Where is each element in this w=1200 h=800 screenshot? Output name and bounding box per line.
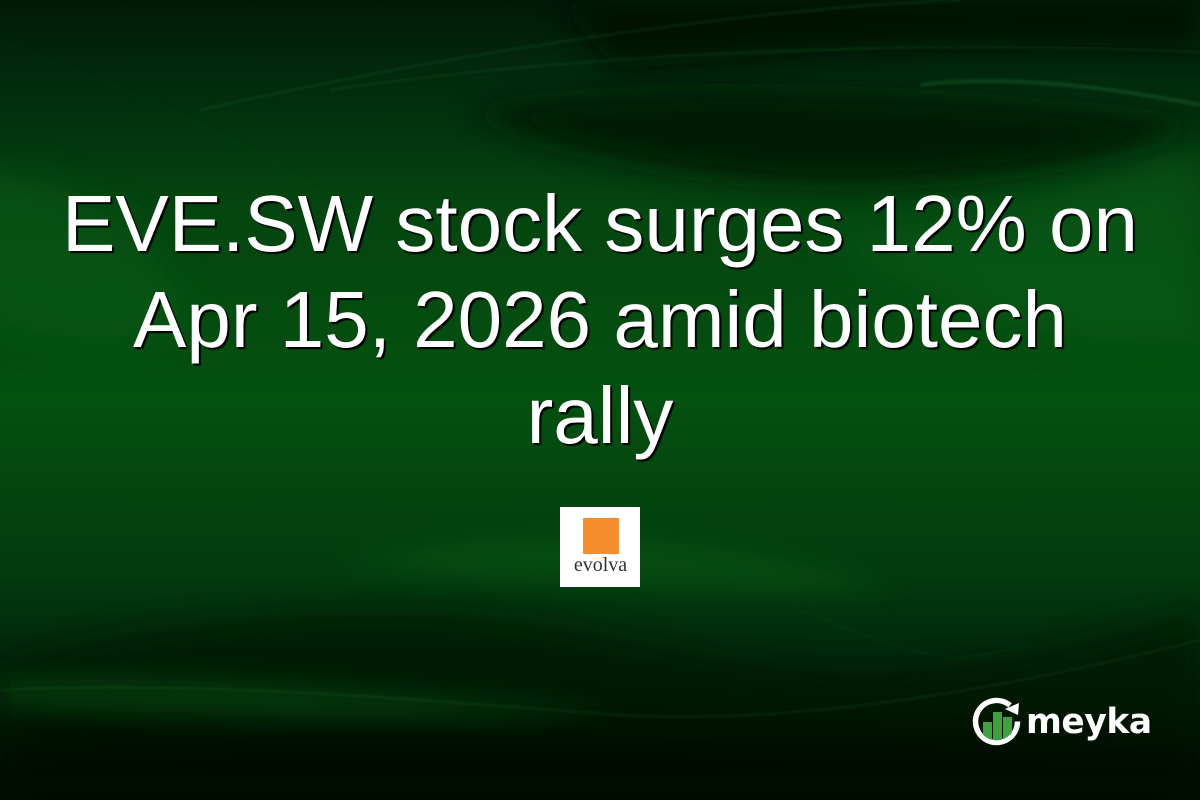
brand logo: meyka (972, 698, 1152, 746)
title: EVE.SW stock surges 12% on (62, 179, 1138, 268)
brand wordmark: meyka (1026, 702, 1152, 742)
dark band lower (0, 610, 1200, 800)
title (62, 179, 1138, 462)
icon: orange square (583, 518, 619, 554)
company logo: evolva (560, 507, 640, 587)
title: rally (527, 371, 673, 460)
dark band top (560, 0, 1200, 70)
title: Apr 15, 2026 amid biotech (133, 275, 1067, 364)
icon: circular arrow with bars (972, 698, 1020, 746)
logo wordmark: evolva (574, 554, 627, 576)
bright lower bands (330, 537, 900, 593)
lit band under dark eye and side glows (820, 140, 1200, 342)
